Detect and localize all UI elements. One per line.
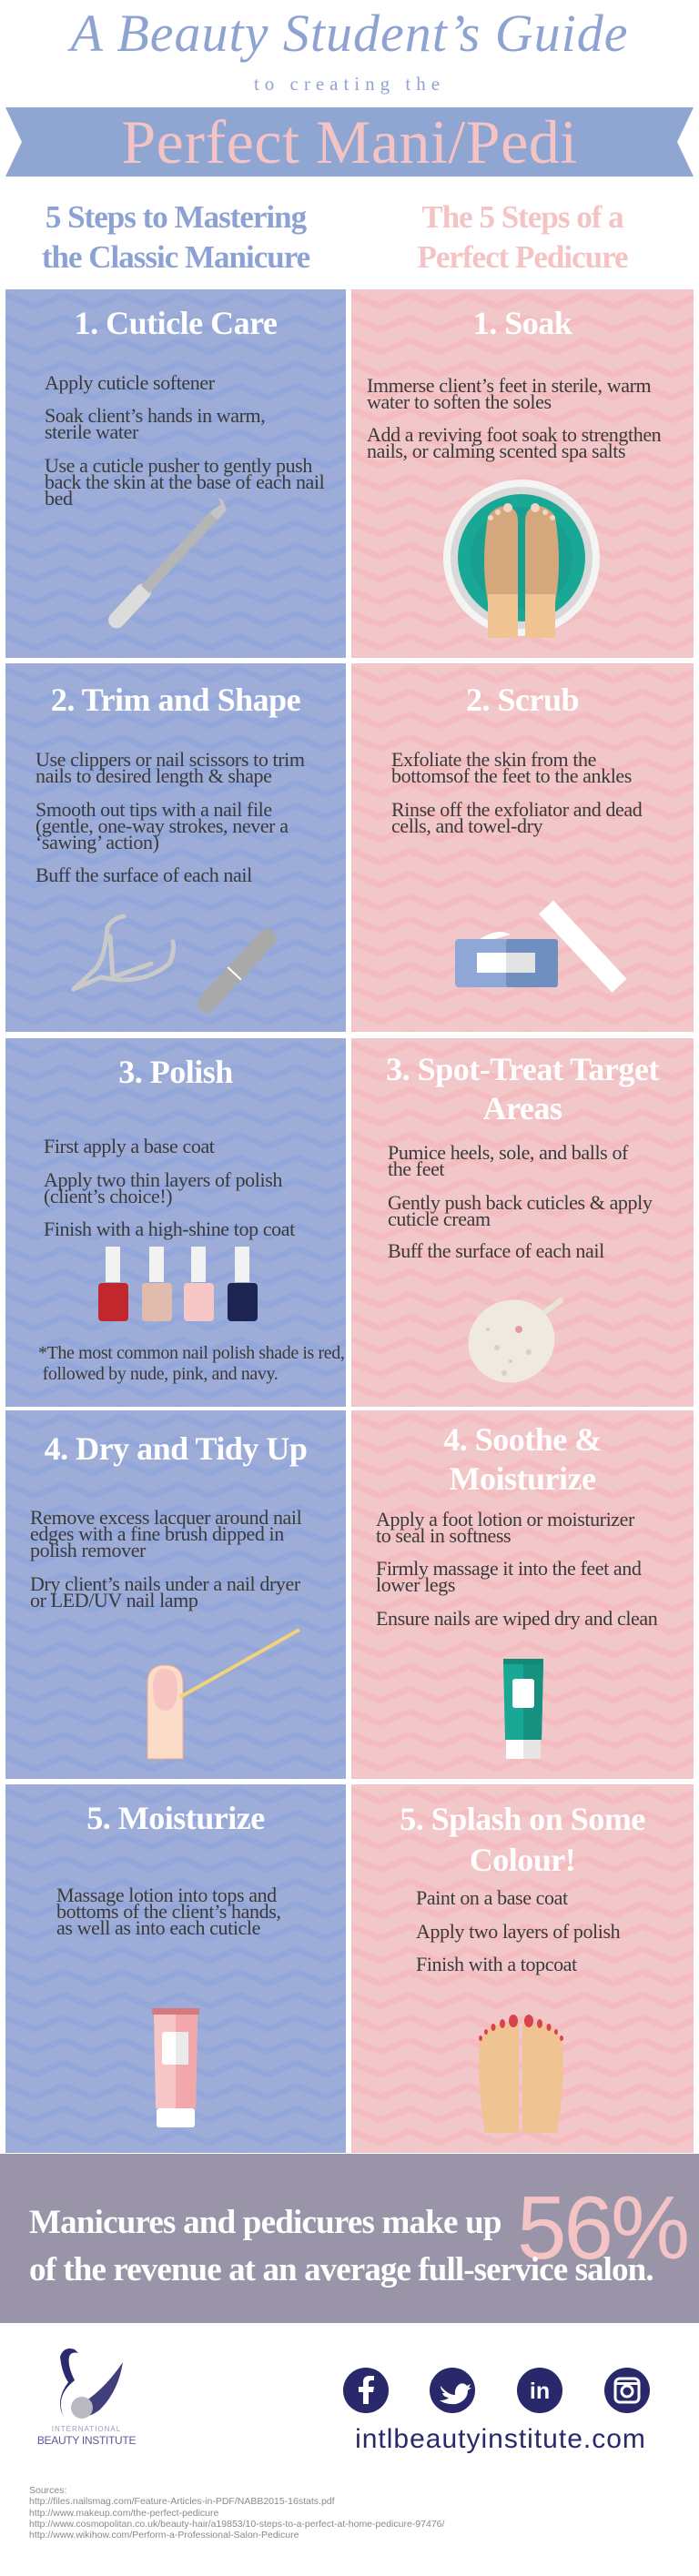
icon: teal tube <box>503 1659 543 1759</box>
panel title: 5. Splash on Some <box>400 1801 645 1837</box>
panel: soothe: lower legs <box>376 1573 455 1596</box>
panel title: 3. Polish <box>118 1054 233 1090</box>
text block: Remove excess lacquer around nail <box>30 1506 301 1529</box>
logo: BEAUTY INSTITUTE <box>37 2434 136 2447</box>
icon: finger and brush <box>147 1628 300 1760</box>
text block: Massage lotion into tops and <box>56 1884 277 1906</box>
text block: Apply a foot lotion or moisturizer <box>376 1508 634 1530</box>
text block: edges with a fine brush dipped in <box>30 1522 284 1545</box>
icon: nippers and file <box>71 914 277 1013</box>
icon: pink tube <box>152 2008 199 2127</box>
panel: spot-treat: cuticle cream <box>388 1207 491 1230</box>
panel: spot-treat: Buff the surface of each nail <box>388 1239 604 1262</box>
panel: moisturize <box>5 1784 346 2153</box>
panel: trim and shape <box>5 663 346 1032</box>
stat number: 56% <box>517 2177 687 2278</box>
panel: cuticle care: bed <box>45 487 73 510</box>
panel: scrub: Rinse off the exfoliator and dead <box>391 798 642 821</box>
text block <box>388 1141 628 1180</box>
panel: splash on colour <box>351 1784 694 2153</box>
footnote: *The most common nail polish shade is red, <box>38 1343 344 1363</box>
text block: Exfoliate the skin from the <box>391 748 596 771</box>
text block: Immerse client’s feet in sterile, warm <box>367 374 651 397</box>
panel: soak <box>351 289 694 658</box>
panel: scrub: cells, and towel-dry <box>391 814 542 837</box>
panel: trim and shape: Smooth out tips with a nail file <box>35 798 272 821</box>
text block: bottoms of the client’s hands, <box>56 1900 280 1923</box>
heading: manicure <box>42 199 309 275</box>
text block: Paint on a base coat <box>416 1886 568 1909</box>
sources: http://www.cosmopolitan.co.uk/beauty-hair/a19853/10-steps-to-a-perfect-at-home-pedicure-97476/ <box>29 2519 444 2530</box>
footnote: followed by nude, pink, and navy. <box>43 1364 278 1384</box>
panel title: Areas <box>483 1090 562 1126</box>
panel: soothe: Firmly massage it into the feet and <box>376 1557 641 1580</box>
icon: pumice stone <box>468 1298 564 1383</box>
text block: the feet <box>388 1157 444 1180</box>
icon: cuticle pusher <box>108 493 227 628</box>
text block <box>391 748 632 787</box>
text block: to seal in softness <box>376 1524 511 1547</box>
social icons <box>343 2368 650 2413</box>
logo: INTERNATIONAL <box>52 2425 121 2433</box>
panel title <box>443 1421 602 1497</box>
sources: http://www.wikihow.com/Perform-a-Professional-Salon-Pedicure <box>29 2530 299 2541</box>
panel: polish: Apply two thin layers of polish <box>44 1168 282 1191</box>
text block <box>35 748 305 787</box>
panel title: 2. Scrub <box>466 682 579 718</box>
panel: polish: (client’s choice!) <box>44 1185 172 1207</box>
heading: pedicure: Perfect Pedicure <box>417 239 628 275</box>
panel: soothe <box>351 1410 694 1779</box>
heading: pedicure <box>417 199 628 275</box>
heading: manicure: 5 Steps to Mastering <box>46 199 306 235</box>
sources: http://files.nailsmag.com/Feature-Articles-in-PDF/NABB2015-16stats.pdf <box>29 2496 335 2507</box>
panel title: 3. Spot-Treat Target <box>386 1051 659 1087</box>
panel: spot-treat: Gently push back cuticles & apply <box>388 1191 652 1214</box>
banner: Perfect Mani/Pedi <box>121 107 578 177</box>
footnote <box>38 1343 344 1384</box>
text block <box>30 1506 302 1561</box>
panel title: 2. Trim and Shape <box>51 682 300 718</box>
panel title: 5. Moisturize <box>86 1800 265 1836</box>
panel: cuticle care: sterile water <box>45 420 138 443</box>
panel: trim and shape: (gentle, one-way strokes, never a <box>35 814 289 837</box>
subtitle: to creating the <box>254 73 445 95</box>
panel title: 1. Soak <box>473 305 572 341</box>
text block <box>367 374 652 413</box>
panel title <box>386 1051 659 1126</box>
title script: A Beauty Student’s Guide <box>70 4 629 63</box>
panel title: 1. Cuticle Care <box>75 305 277 341</box>
panel: cuticle care: back the skin at the base of each nail <box>45 470 324 493</box>
text block: as well as into each cuticle <box>56 1916 260 1939</box>
panel: trim and shape: ‘sawing’ action) <box>35 831 159 854</box>
panel: trim and shape: Buff the surface of each nail <box>35 864 252 886</box>
icon: painted feet <box>479 2015 563 2133</box>
sources <box>29 2485 444 2541</box>
panel: soak: nails, or calming scented spa salts <box>367 439 625 462</box>
panel: polish: Finish with a high-shine top coat <box>44 1217 295 1240</box>
text block <box>56 1884 280 1939</box>
panel title: 4. Dry and Tidy Up <box>45 1430 307 1467</box>
social icons: in <box>530 2379 550 2404</box>
text block: bottomsof the feet to the ankles <box>391 764 632 787</box>
icon: scrub jar and board <box>455 901 626 993</box>
stat text: Manicures and pedicures make up <box>29 2204 501 2241</box>
stat bar <box>0 2154 699 2323</box>
panel: cuticle care <box>5 289 346 658</box>
text block: water to soften the soles <box>367 390 552 413</box>
panel: cuticle care: Soak client’s hands in warm, <box>45 404 265 427</box>
text block: polish remover <box>30 1539 146 1561</box>
text block: Apply cuticle softener <box>45 371 215 394</box>
banner <box>5 107 694 177</box>
panel: cuticle care: Use a cuticle pusher to gently push <box>45 454 312 477</box>
stat bar: of the revenue at an average full-service salon. <box>29 2251 653 2288</box>
text block: nails to desired length & shape <box>35 764 271 787</box>
panel: dry and tidy: or LED/UV nail lamp <box>30 1589 198 1611</box>
panel: splash on colour: Finish with a topcoat <box>416 1953 577 1975</box>
panel: dry and tidy <box>5 1410 346 1779</box>
sources: http://www.makeup.com/the-perfect-pedicure <box>29 2508 218 2519</box>
panel: scrub <box>351 663 694 1032</box>
icon: polish bottles <box>98 1247 258 1321</box>
panel title: Moisturize <box>450 1460 595 1497</box>
text block: Use clippers or nail scissors to trim <box>35 748 305 771</box>
panel title: Colour! <box>470 1842 575 1878</box>
heading: pedicure: The 5 Steps of a <box>421 199 623 235</box>
panel: dry and tidy: Dry client’s nails under a nail dryer <box>30 1572 300 1595</box>
logo <box>37 2349 136 2447</box>
text block: First apply a base coat <box>44 1135 215 1157</box>
panel: spot-treat <box>351 1038 694 1407</box>
text block: Pumice heels, sole, and balls of <box>388 1141 628 1164</box>
icon: foot bath <box>443 480 600 638</box>
website: intlbeautyinstitute.com <box>355 2424 646 2454</box>
panel title <box>400 1801 645 1878</box>
panel: polish <box>5 1038 346 1407</box>
heading: manicure: the Classic Manicure <box>42 239 309 275</box>
text block <box>376 1508 635 1547</box>
panel title: 4. Soothe & <box>443 1421 602 1458</box>
panel: splash on colour: Apply two layers of polish <box>416 1920 620 1943</box>
panel: soak: Add a reviving foot soak to strengthen <box>367 423 661 446</box>
panel: soothe: Ensure nails are wiped dry and clean <box>376 1607 657 1630</box>
sources: Sources: <box>29 2485 66 2496</box>
